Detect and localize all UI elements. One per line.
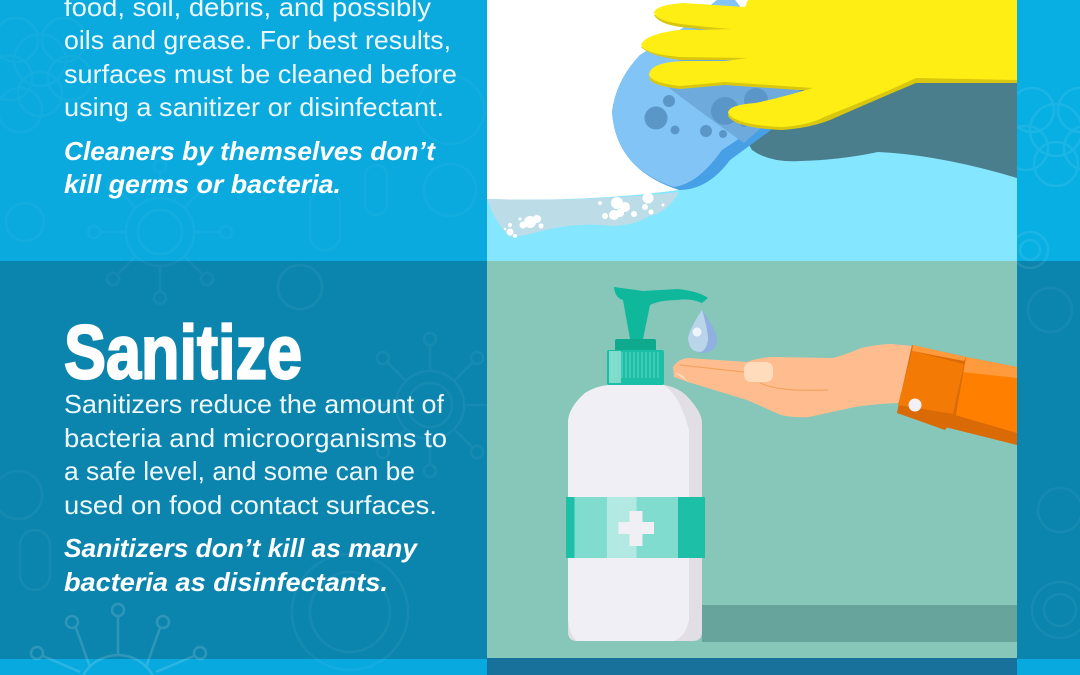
sanitize description: Sanitizers reduce the amount of xyxy=(64,389,445,419)
cuff with button xyxy=(897,345,966,430)
sanitize emphasis note xyxy=(64,533,419,597)
germ pattern background, sanitize section xyxy=(0,265,1080,670)
sanitize description: a safe level, and some can be xyxy=(64,456,415,486)
heading: Sanitize: Sanitize xyxy=(64,310,302,396)
palm crease xyxy=(680,365,828,390)
panel: clean section background xyxy=(0,0,1080,262)
panel: right margin strip, clean section xyxy=(1017,0,1080,262)
medical cross xyxy=(618,511,654,546)
sleeve xyxy=(945,357,1017,445)
yellow glove xyxy=(641,0,1017,127)
sponge holes xyxy=(644,88,768,138)
clean description: surfaces must be cleaned before xyxy=(64,59,457,89)
clean emphasis note xyxy=(64,136,436,199)
fingertip xyxy=(674,372,688,382)
clean description: using a sanitizer or disinfectant. xyxy=(64,92,444,122)
heading and text: clean section xyxy=(64,0,457,199)
wiped white surface xyxy=(487,0,1017,200)
germ pattern background, clean section xyxy=(0,18,484,304)
shelf shadow xyxy=(702,605,1017,642)
pump collar xyxy=(615,339,656,352)
sponge xyxy=(612,0,805,190)
illustration: gloved hand wiping surface xyxy=(487,0,1017,261)
clean emphasis note: kill germs or bacteria. xyxy=(64,169,341,199)
teal glimpse above glove xyxy=(847,0,901,3)
glove shadow edge xyxy=(728,78,1017,130)
germ pattern, right strip of clean section xyxy=(1004,88,1080,268)
arm shadow xyxy=(735,80,1017,178)
dark strip below illustration xyxy=(487,658,1017,675)
water surface background xyxy=(487,0,1017,261)
hand xyxy=(673,344,912,417)
clean description xyxy=(64,0,457,122)
panel: sanitize section background xyxy=(0,261,1080,660)
sanitize description: used on food contact surfaces. xyxy=(64,490,437,520)
thumb nail xyxy=(744,362,773,382)
sanitize emphasis note: Sanitizers don’t kill as many xyxy=(64,533,419,563)
sanitize description: bacteria and microorganisms to xyxy=(64,423,447,453)
germ pattern, bottom section xyxy=(31,604,206,675)
illustration background xyxy=(487,261,1017,658)
sanitize description xyxy=(64,389,447,520)
illustration: sanitizer pump and hand xyxy=(487,261,1017,675)
bottle label xyxy=(566,497,705,558)
soap drop xyxy=(688,310,717,353)
panel: bottom section background xyxy=(0,659,1080,675)
bottle body xyxy=(568,385,702,641)
sanitize emphasis note: bacteria as disinfectants. xyxy=(64,567,388,597)
bottle cap xyxy=(607,350,664,385)
foam bubbles xyxy=(504,192,664,238)
clean description: oils and grease. For best results, xyxy=(64,25,451,55)
sponge shadow under glove xyxy=(664,70,805,143)
pump head xyxy=(614,287,708,339)
damp trail xyxy=(487,192,679,237)
clean emphasis note: Cleaners by themselves don’t xyxy=(64,136,436,166)
